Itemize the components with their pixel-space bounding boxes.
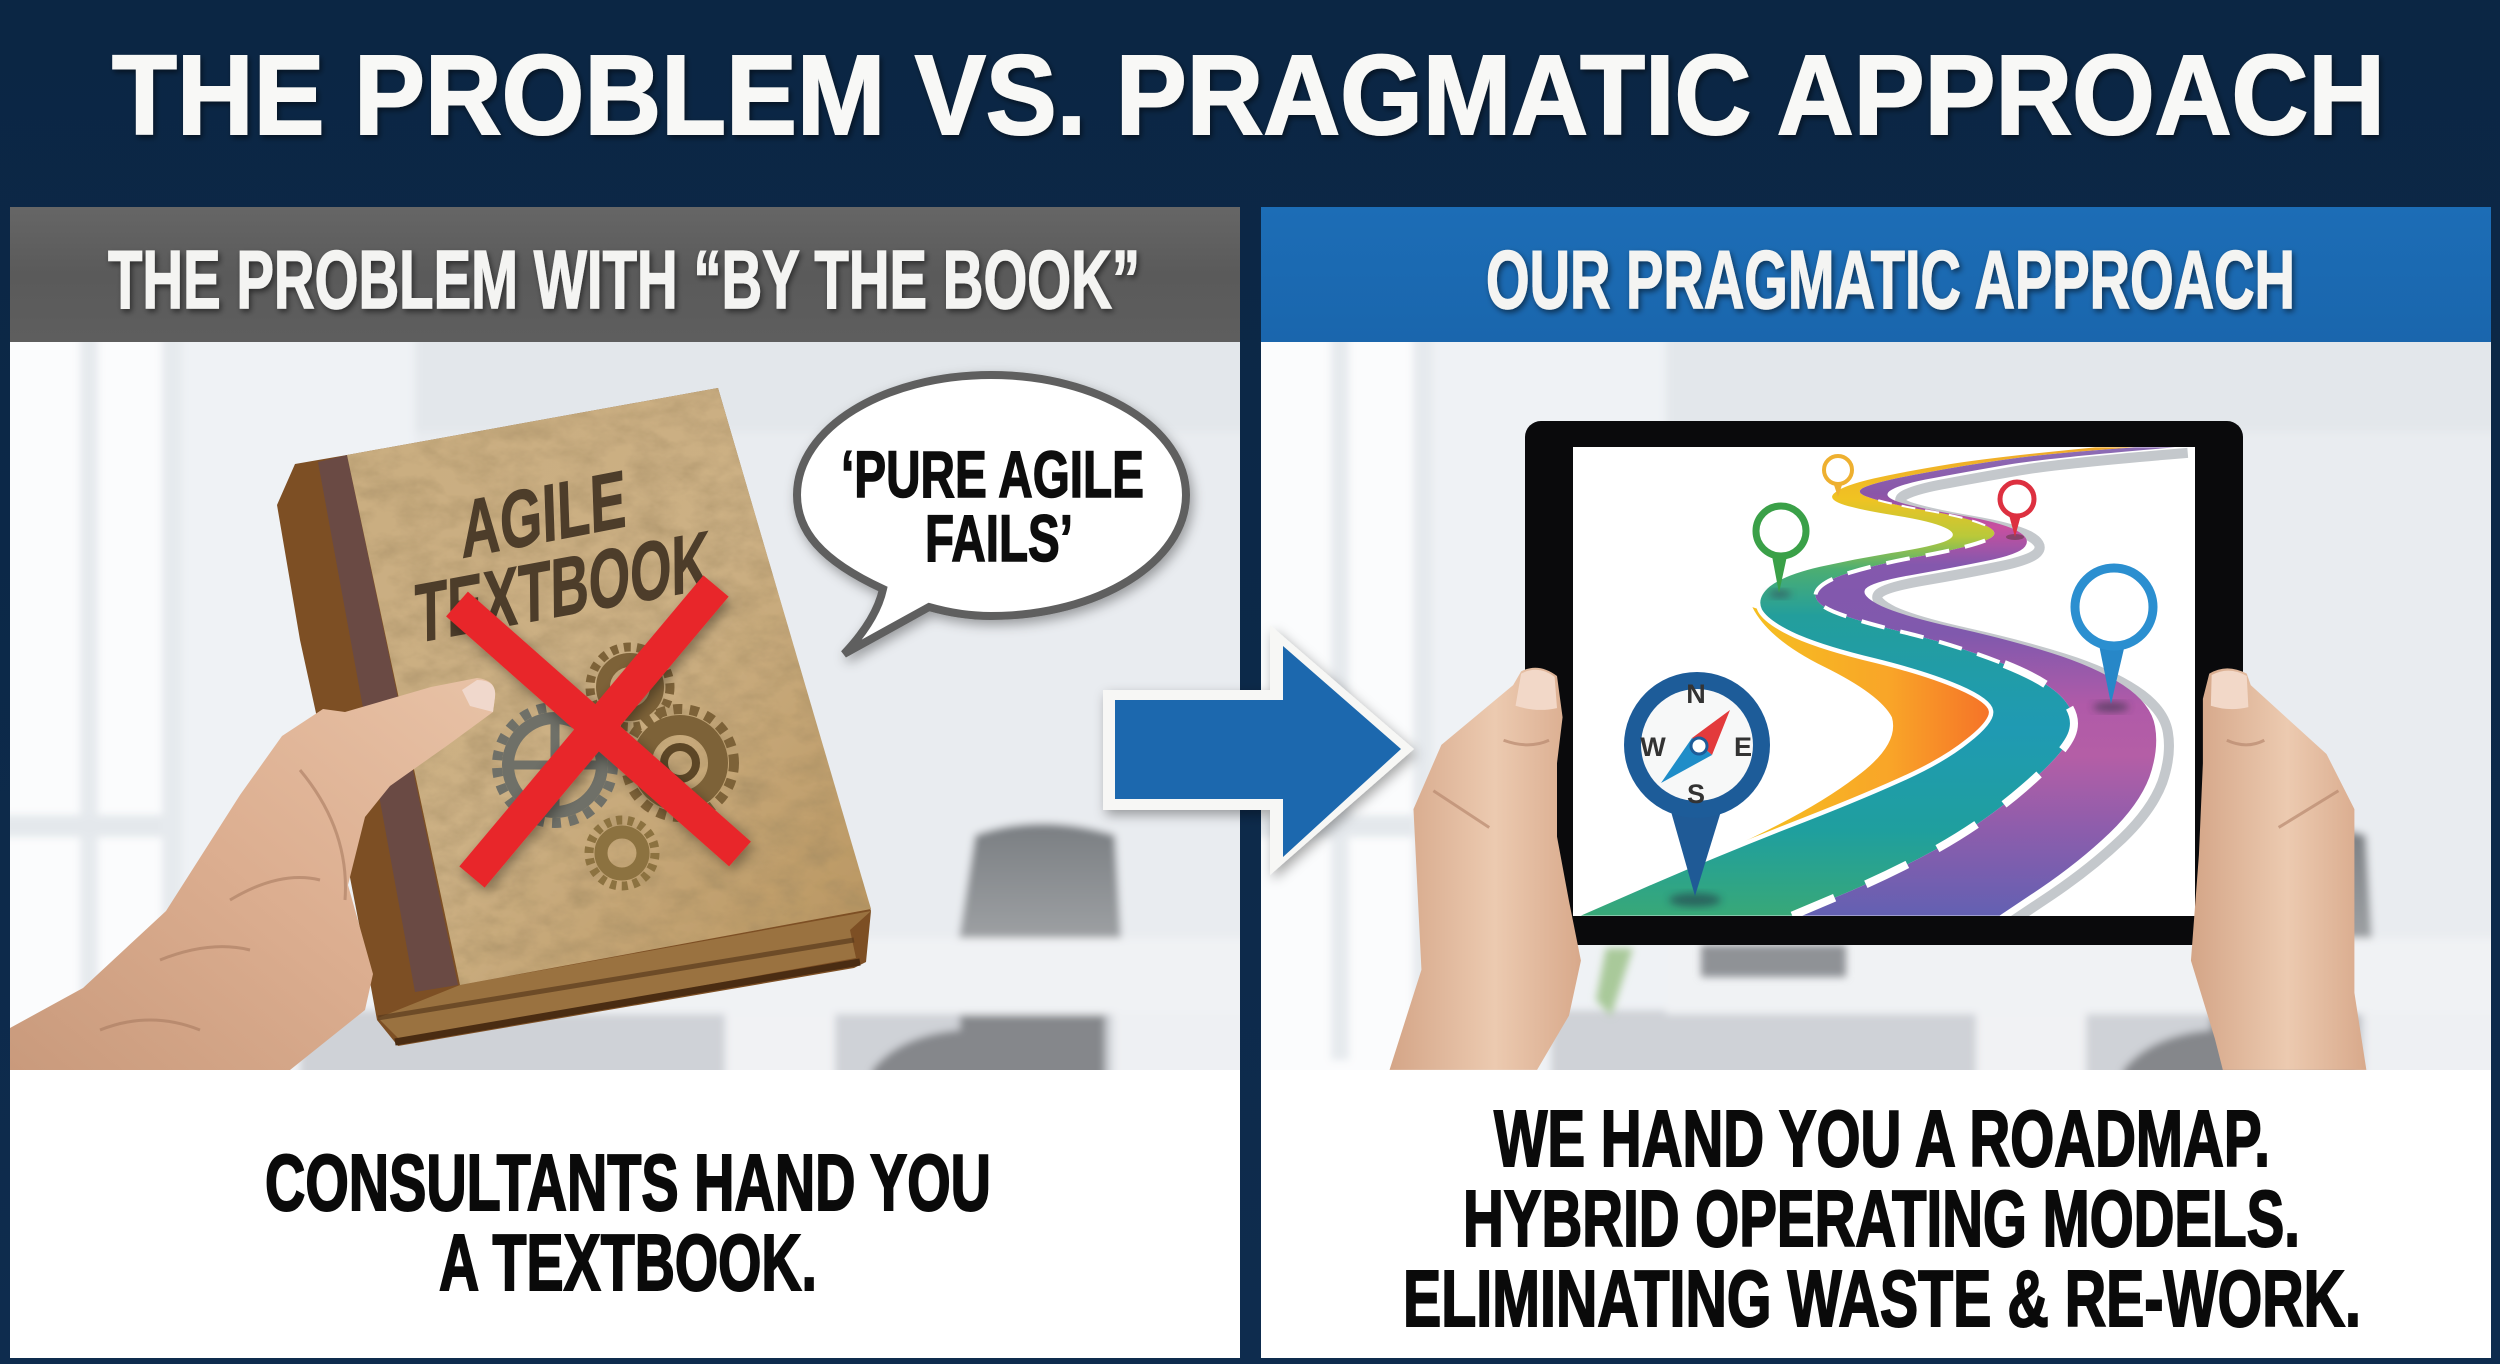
pin: yellow xyxy=(1824,456,1852,497)
road lane right xyxy=(1792,447,2175,916)
pin: green xyxy=(1756,506,1806,598)
compass letters xyxy=(1640,679,1752,809)
title: THE PROBLEM VS. PRAGMATIC APPROACH xyxy=(112,32,2385,158)
fingernails and creases xyxy=(1433,670,2338,827)
winding road xyxy=(1581,447,2188,921)
pin: red xyxy=(2000,482,2034,540)
caption panel: problem: CONSULTANTS HAND YOU xyxy=(265,1138,991,1227)
compass letters: E xyxy=(1734,732,1752,762)
compass letters: N xyxy=(1686,679,1706,709)
illustration: old agile textbook xyxy=(277,388,871,1046)
gears xyxy=(497,647,734,886)
lane dashes xyxy=(1792,662,2074,916)
arrow xyxy=(1103,625,1414,875)
office photo background: left xyxy=(10,342,1240,1070)
speech bubble xyxy=(797,375,1186,654)
road lane left xyxy=(1581,447,2135,916)
office photo background: right xyxy=(1261,342,2491,1070)
panel: pragmatic approach xyxy=(1201,207,2500,1358)
bubble text xyxy=(841,437,1144,575)
caption panel: problem xyxy=(10,1070,1240,1358)
illustration: hand holding book xyxy=(10,678,495,1070)
book spine xyxy=(318,455,458,992)
book title: TEXTBOOK xyxy=(414,513,710,661)
book cover xyxy=(347,388,871,985)
red X xyxy=(457,586,740,877)
pin: blue xyxy=(2075,568,2153,712)
caption panel: problem: A TEXTBOOK. xyxy=(439,1218,817,1307)
panel header: problem: THE PROBLEM WITH “BY THE BOOK” xyxy=(108,233,1140,326)
book title xyxy=(414,454,710,661)
compass letters: W xyxy=(1640,732,1666,762)
illustration: tablet xyxy=(1525,421,2243,945)
compass letters: S xyxy=(1687,779,1705,809)
panel header: approach xyxy=(1261,207,2491,342)
road edge shadow xyxy=(1877,453,2188,921)
book body xyxy=(277,388,871,1046)
illustration: right hand holding tablet xyxy=(2191,668,2366,1070)
bubble text: FAILS’ xyxy=(925,501,1073,575)
road edges xyxy=(1716,608,1994,855)
icon: compass pin xyxy=(1624,672,1770,907)
book title: AGILE xyxy=(459,454,628,576)
panel header: problem xyxy=(10,207,1240,342)
caption panel: approach xyxy=(1261,1070,2491,1358)
orange wedge xyxy=(1746,607,1989,841)
panel: the problem xyxy=(0,207,1300,1358)
illustration: left hand holding tablet xyxy=(1390,668,1581,1070)
bubble text: ‘PURE AGILE xyxy=(841,437,1144,511)
